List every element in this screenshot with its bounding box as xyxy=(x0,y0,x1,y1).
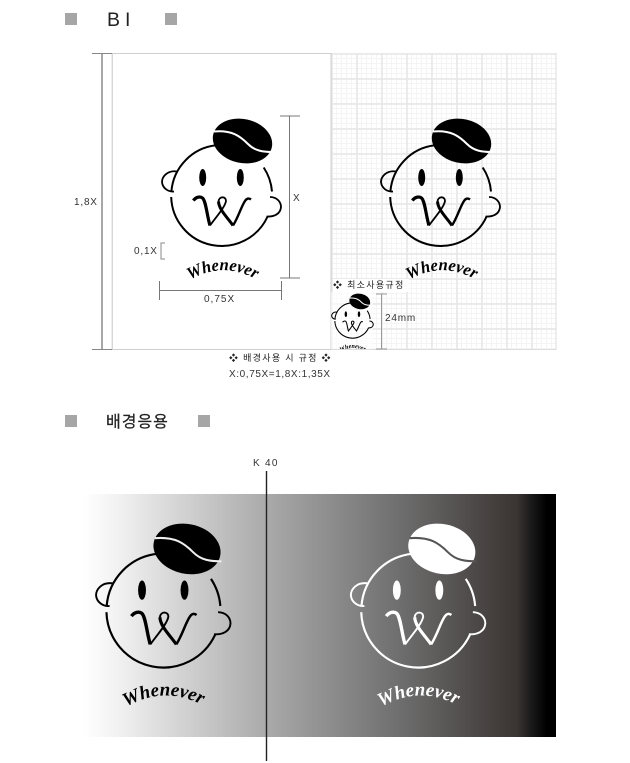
panel: gradient background xyxy=(83,494,556,737)
dimension: 24mm xyxy=(376,294,416,349)
wordmark: Whenever xyxy=(186,261,260,278)
wordmark: Whenever xyxy=(339,344,366,349)
logo: minimum size xyxy=(331,292,374,349)
dimension: X height xyxy=(280,116,300,278)
K40 marker line xyxy=(266,471,268,761)
caption: background use rule: X:0,75X=1,8X:1,35X xyxy=(229,369,331,380)
caption: minimum size rule: ❖ 최소사용규정 xyxy=(333,280,405,290)
logo: black on light xyxy=(96,518,231,668)
wordmark: white: Whenever xyxy=(376,686,460,706)
dimension: 1.8X label: 1,8X xyxy=(74,197,98,208)
label: K 40: K 40 xyxy=(253,458,279,469)
heading: BI xyxy=(65,9,177,31)
dimension: 0.1X gap xyxy=(134,243,165,259)
dimension: 0.75X width xyxy=(160,281,282,305)
logo: main construction logo xyxy=(161,118,282,278)
logo: on grid xyxy=(380,118,501,278)
panel: logo proportions xyxy=(92,54,331,350)
heading: BI: BI xyxy=(107,9,135,31)
caption: background use rule: ❖ 배경사용 시 규정 ❖ xyxy=(229,352,332,363)
logo: white on dark xyxy=(351,518,485,668)
heading: background application: 배경응용 xyxy=(106,413,169,431)
heading: background application xyxy=(65,413,210,431)
dimension: 0.1X gap: 0,1X xyxy=(134,246,158,257)
caption: background use rule xyxy=(229,352,332,380)
wordmark: Whenever xyxy=(405,261,478,278)
dimension: 24mm: 24mm xyxy=(385,313,416,324)
panel: grid xyxy=(331,53,556,350)
dimension: X height: X xyxy=(293,193,300,204)
dimension: 0.75X width: 0,75X xyxy=(204,294,235,305)
wordmark: black: Whenever xyxy=(122,686,206,706)
